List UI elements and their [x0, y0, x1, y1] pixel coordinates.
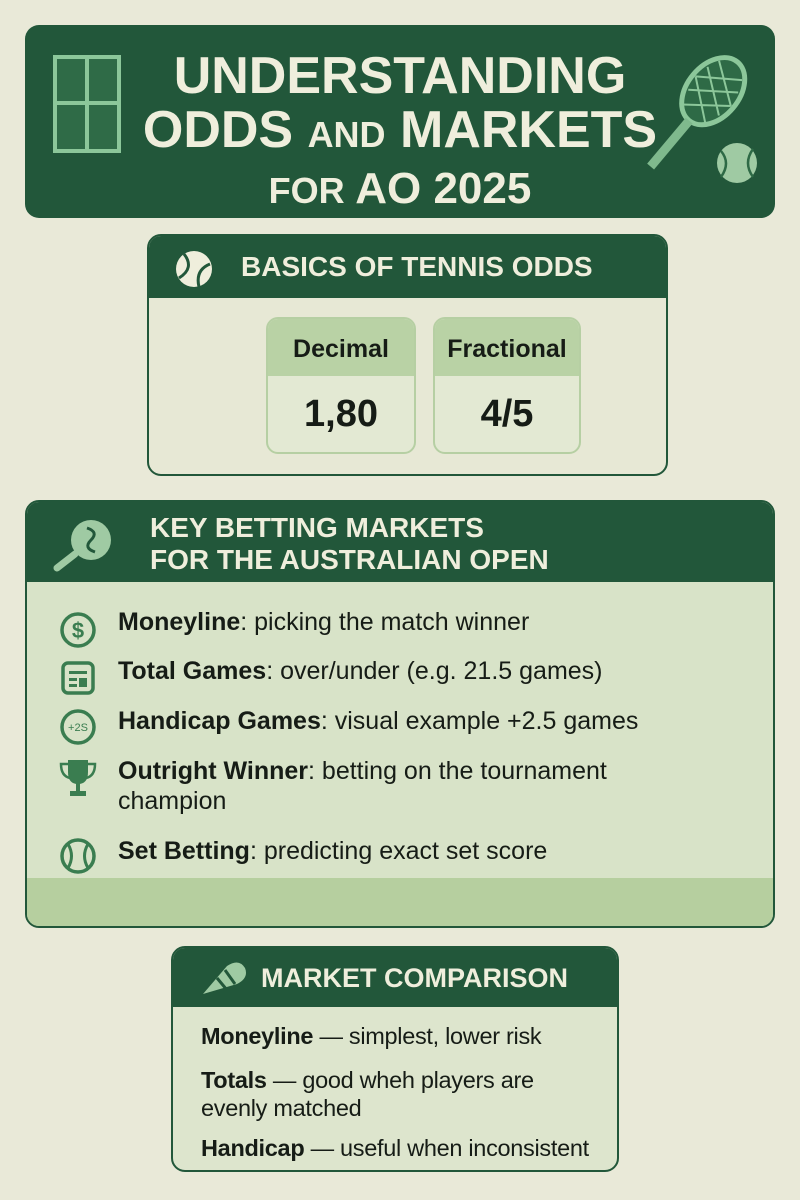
bottom band — [27, 878, 773, 926]
heading — [173, 948, 617, 1007]
card: fractional: Fractional — [447, 335, 567, 363]
panel: key betting markets — [25, 500, 775, 928]
icon: totals — [61, 661, 95, 695]
icon: dollar: $ — [72, 618, 84, 643]
title: FOR AO 2025 — [269, 164, 531, 213]
item: handicap: Handicap Games: visual example +2.5 games — [118, 707, 638, 735]
icon: handicap — [60, 709, 96, 745]
panel: market comparison — [171, 946, 619, 1172]
item: total games: Total Games: over/under (e.g. 21.5 games) — [118, 657, 602, 685]
heading: BASICS OF TENNIS ODDS — [241, 251, 593, 282]
heading: FOR THE AUSTRALIAN OPEN — [150, 544, 549, 575]
card: decimal: Decimal — [293, 335, 389, 363]
text: comparison: Handicap — useful when inconsistent — [201, 1135, 589, 1161]
panel: basics of tennis odds — [147, 234, 668, 476]
heading — [27, 502, 773, 582]
title: UNDERSTANDING — [174, 47, 626, 105]
item: moneyline: Moneyline: picking the match winner — [118, 608, 529, 636]
icon: racket and ball — [647, 55, 757, 183]
text: comparison: evenly matched — [201, 1095, 361, 1121]
icon: tennis ball — [176, 251, 212, 287]
card: fractional — [433, 317, 581, 454]
title — [143, 47, 657, 213]
card: fractional: 4/5 — [481, 393, 533, 435]
card: decimal — [266, 317, 416, 454]
item: set betting: Set Betting: predicting exact set score — [118, 837, 547, 865]
icon: dollar — [60, 612, 96, 648]
text: comparison — [201, 1023, 589, 1161]
text: comparison: Totals — good wheh players are — [201, 1067, 534, 1093]
icon: shuttle — [203, 962, 246, 994]
icon: ball — [60, 838, 96, 874]
list: markets — [60, 608, 638, 874]
icon: handicap: +2S — [68, 722, 88, 734]
icon: magnifier — [54, 520, 111, 572]
heading: KEY BETTING MARKETS — [150, 512, 484, 543]
title: ODDS AND MARKETS — [143, 101, 657, 159]
item: outright winner — [118, 757, 607, 815]
text: comparison: Moneyline — simplest, lower risk — [201, 1023, 541, 1049]
item: outright winner: champion — [118, 787, 226, 815]
icon: court window — [53, 55, 121, 153]
heading — [149, 236, 666, 298]
card: decimal: 1,80 — [304, 393, 378, 435]
header banner — [25, 25, 775, 218]
icon: trophy — [60, 760, 96, 796]
heading: MARKET COMPARISON — [261, 963, 568, 993]
item: outright winner: Outright Winner: betting on the tournament — [118, 757, 607, 785]
